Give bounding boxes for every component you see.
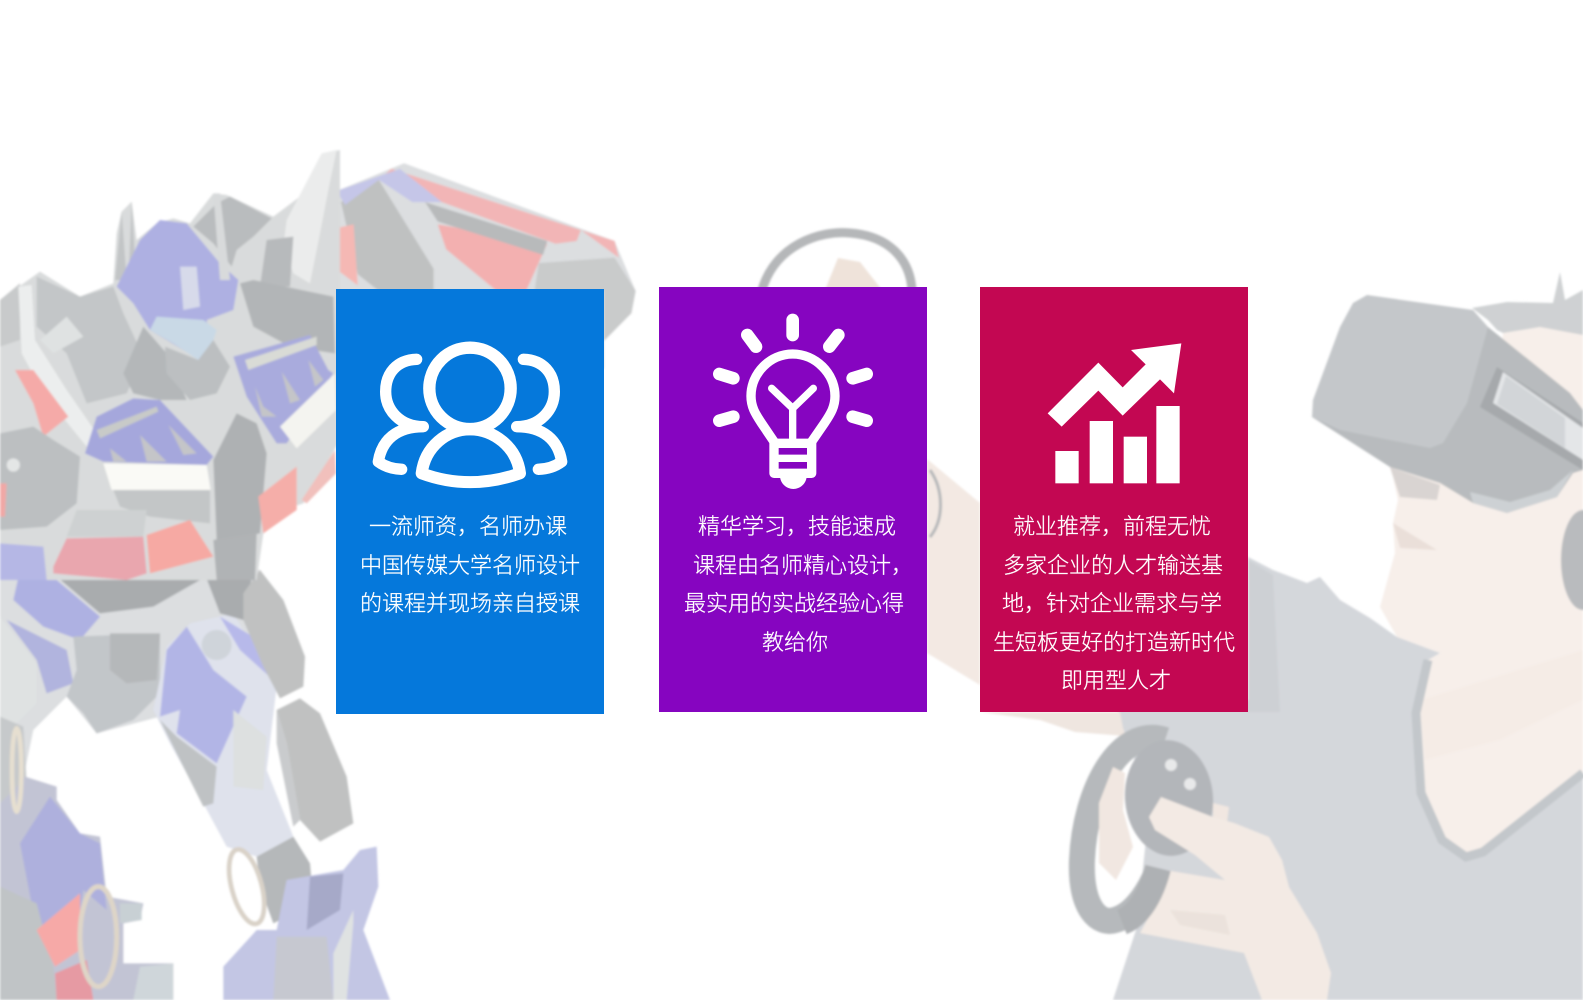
icon: rising bar chart bbox=[1048, 343, 1182, 484]
text: career description: 就业推荐，前程无忧 bbox=[1013, 514, 1211, 539]
text: faculty description: 中国传媒大学名师设计 bbox=[360, 553, 580, 578]
text: faculty description bbox=[360, 514, 580, 616]
panel: career (crimson) bbox=[980, 287, 1248, 712]
text: fast learning description: 精华学习，技能速成 bbox=[698, 514, 896, 539]
text: fast learning description: 课程由名师精心设计， bbox=[693, 553, 913, 578]
text: fast learning description bbox=[684, 514, 913, 655]
text: fast learning description: 最实用的实战经验心得 bbox=[684, 591, 904, 616]
text: career description: 多家企业的人才输送基 bbox=[1003, 553, 1223, 578]
text: career description bbox=[993, 514, 1235, 693]
panel: faculty (blue) bbox=[336, 289, 604, 714]
icon: three people bbox=[372, 342, 568, 488]
text: faculty description: 一流师资，名师办课 bbox=[369, 514, 567, 539]
text: fast learning description: 教给你 bbox=[762, 630, 828, 655]
text: career description: 即用型人才 bbox=[1061, 668, 1171, 693]
text: career description: 生短板更好的打造新时代 bbox=[993, 630, 1235, 655]
text: career description: 地，针对企业需求与学 bbox=[1002, 591, 1222, 616]
panel: fast learning (purple) bbox=[659, 287, 927, 712]
text: faculty description: 的课程并现场亲自授课 bbox=[360, 591, 580, 616]
background image: transformer robot bbox=[0, 150, 636, 1000]
icon: light bulb bbox=[713, 314, 873, 489]
